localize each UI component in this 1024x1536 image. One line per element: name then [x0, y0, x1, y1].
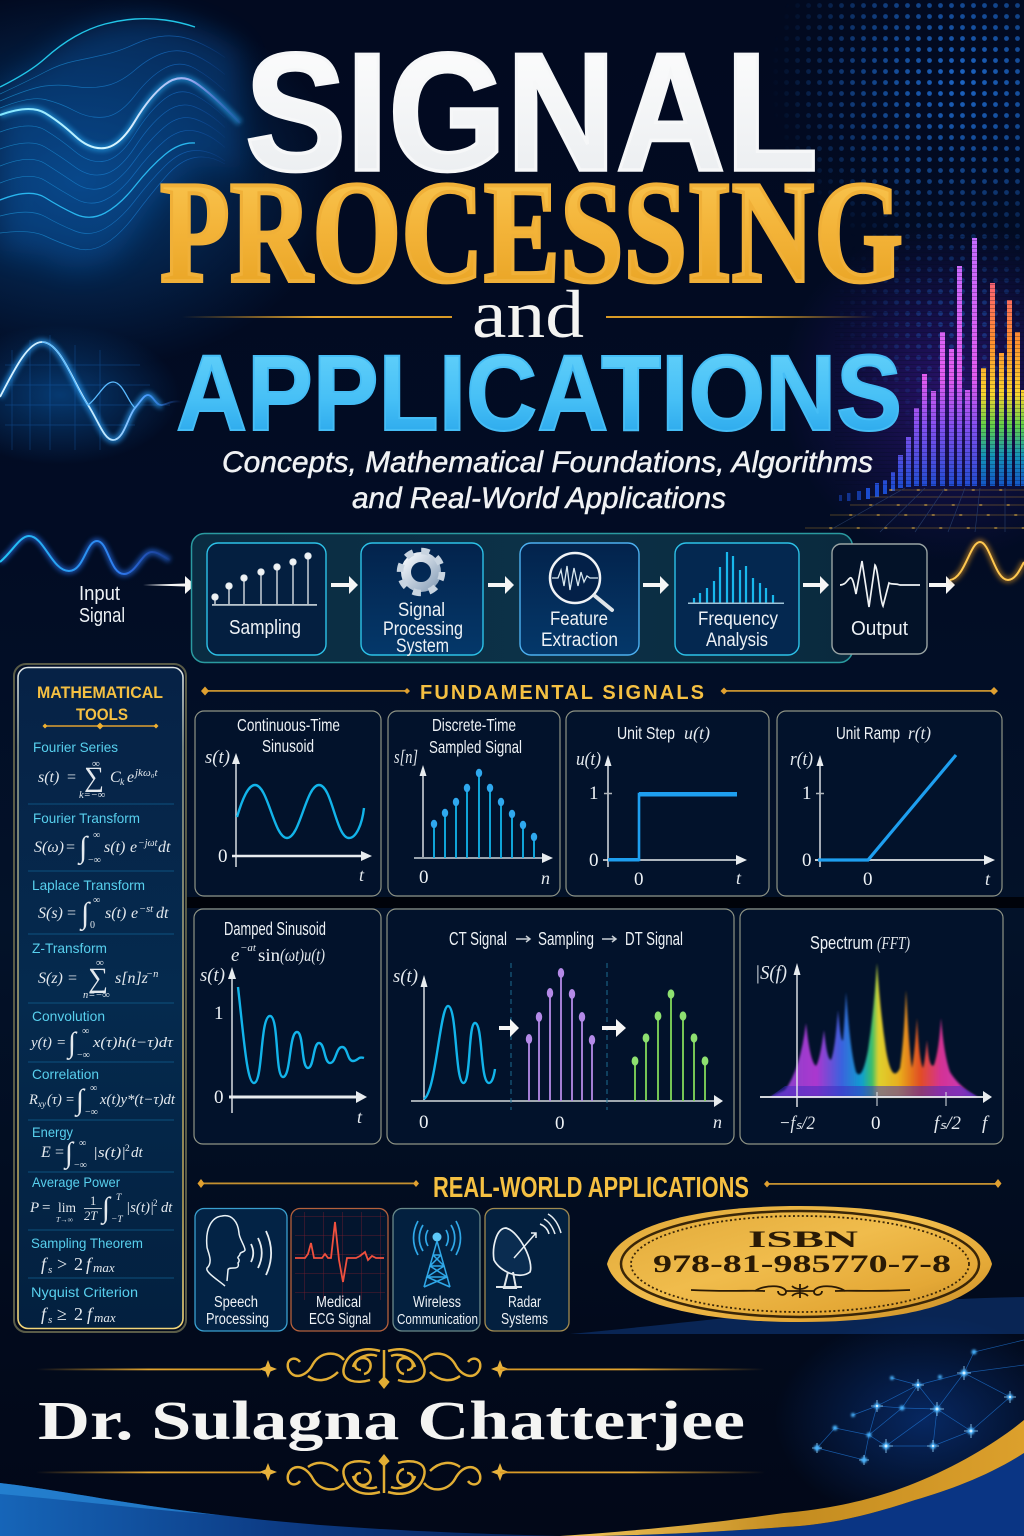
chart: damped sinusoid: Damped Sinusoid — [224, 919, 326, 939]
title: and with rules: and — [472, 276, 584, 352]
icon: output orange wave — [950, 542, 1024, 580]
chart: spectrum fft: Spectrum — [810, 933, 873, 953]
formula: average power: Average Power — [32, 1174, 120, 1190]
formula: average power: −T — [111, 1215, 123, 1225]
formula: fourier transform: Fourier Transform — [33, 810, 140, 826]
formula: sampling theorem: f — [41, 1254, 49, 1274]
card: speech processing — [195, 1208, 287, 1331]
formula: laplace transform: s(t) — [105, 905, 126, 922]
decoration: top author ornament — [36, 1349, 765, 1387]
decoration: glowing network — [775, 1315, 1024, 1525]
formula: average power: dt — [161, 1200, 173, 1216]
formula: nyquist criterion: f — [41, 1304, 49, 1324]
card: wireless communication: Wireless — [413, 1294, 461, 1311]
formula: laplace transform: ∞ — [93, 895, 100, 906]
formula: fourier series: k=−∞ — [79, 790, 105, 801]
formula: laplace transform: dt — [156, 905, 169, 922]
formula: fourier series: ∞ — [92, 758, 100, 770]
chart: unit step: t — [736, 868, 742, 888]
formula: z-transform — [32, 940, 158, 1001]
formula: z-transform: ∞ — [96, 957, 104, 969]
decoration: halftone dots top right — [784, 3, 1020, 426]
chart: discrete-time sampled signal: n — [541, 868, 550, 888]
formula: nyquist criterion: Nyquist Criterion — [31, 1284, 138, 1300]
formula: z-transform: n=−∞ — [83, 990, 110, 1001]
step: signal processing system — [361, 543, 483, 657]
subtitle: and Real-World Applications — [352, 482, 726, 515]
step: frequency analysis — [675, 543, 799, 655]
chart: spectrum fft: fₛ/2 — [934, 1113, 961, 1134]
chart: ct signal to sampling to dt signal: 0 — [419, 1112, 428, 1133]
card: speech processing: Processing — [206, 1311, 269, 1328]
formula: convolution: = — [57, 1035, 65, 1051]
formula: fourier series: s(t) — [38, 769, 59, 786]
formula: fourier transform: dt — [158, 839, 171, 856]
formula: fourier transform: s(t) — [104, 839, 125, 856]
formula: fourier transform: −jωt — [138, 838, 158, 849]
heading: real-world applications — [198, 1172, 1002, 1204]
chart: ct signal to sampling to dt signal: n — [713, 1112, 722, 1132]
chart: unit ramp: r(t) — [908, 723, 931, 744]
formula: fourier transform: −∞ — [88, 855, 101, 866]
subtitle: Concepts, Mathematical Foundations, Algorithms — [222, 446, 873, 479]
heading: mathematical tools — [37, 683, 163, 730]
chart: damped sinusoid: e — [231, 945, 239, 966]
formula: correlation: x(t)y*(t−τ)dt — [99, 1092, 176, 1108]
formula: energy: Energy — [32, 1124, 73, 1140]
chart: damped sinusoid — [194, 909, 381, 1144]
formula: nyquist criterion: s — [48, 1314, 52, 1326]
formula: fourier series: C — [110, 769, 121, 786]
chart: damped sinusoid: t — [357, 1107, 363, 1127]
formula: laplace transform: 0 — [90, 920, 95, 931]
formula: correlation: ∫ — [74, 1084, 86, 1117]
formula: sampling theorem: > — [57, 1254, 67, 1274]
decoration: bottom left blue swoosh — [0, 1483, 560, 1536]
step: frequency analysis: Frequency — [698, 609, 778, 630]
chart: unit ramp: 1 — [802, 783, 812, 804]
formula: laplace transform: S(s) — [38, 905, 63, 922]
chart: spectrum fft: 0 — [871, 1113, 880, 1134]
chart: unit ramp: t — [985, 869, 991, 889]
formula: energy: dt — [131, 1145, 144, 1161]
chart: unit ramp: Unit Ramp — [836, 723, 900, 743]
formula: average power — [29, 1174, 173, 1225]
formula: energy: ∫ — [63, 1137, 75, 1170]
formula: average power: lim — [58, 1200, 77, 1215]
formula: fourier series: ∑ — [84, 762, 104, 793]
heading: fundamental signals: FUNDAMENTAL SIGNALS — [420, 682, 704, 704]
formula: fourier series: = — [67, 769, 76, 786]
formula: convolution: ∫ — [66, 1027, 78, 1060]
card: medical ecg signal: Medical — [316, 1294, 361, 1311]
text: input signal label — [79, 583, 125, 627]
chart: spectrum fft: f — [982, 1113, 990, 1134]
formula: convolution: Convolution — [32, 1008, 105, 1024]
formula: z-transform: ∑ — [88, 963, 108, 994]
formula: laplace transform: −st — [139, 904, 154, 915]
chart: ct signal to sampling to dt signal: 0 — [555, 1113, 564, 1134]
heading: real-world applications: REAL-WORLD APPLICATIONS — [433, 1172, 749, 1204]
chart: spectrum fft: |S(f) — [755, 962, 787, 984]
chart: continuous-time sinusoid: Continuous-Time — [237, 715, 340, 735]
card: radar systems — [485, 1208, 569, 1331]
chart: discrete-time sampled signal — [388, 711, 560, 896]
formula: correlation: = — [66, 1092, 74, 1108]
chart: unit ramp: r(t) — [790, 749, 813, 770]
formula: nyquist criterion — [31, 1284, 138, 1326]
formula: correlation: ∞ — [90, 1083, 97, 1094]
formula: laplace transform: Laplace Transform — [32, 877, 145, 893]
chart: continuous-time sinusoid — [195, 711, 381, 896]
formula: energy: E — [40, 1144, 51, 1161]
decoration: medallion flourish — [691, 1284, 910, 1298]
step: feature extraction — [520, 543, 639, 655]
step: feature extraction: Extraction — [541, 630, 618, 651]
arrow — [331, 576, 358, 594]
card: radar systems: Systems — [501, 1311, 548, 1328]
formula: nyquist criterion: ≥ — [57, 1304, 67, 1324]
chart: ct signal to sampling to dt signal — [387, 909, 734, 1144]
formula: z-transform: S(z) — [38, 970, 63, 987]
formula: laplace transform: e — [131, 905, 138, 922]
formula: laplace transform: = — [67, 905, 76, 922]
formula: convolution: ∞ — [82, 1026, 89, 1037]
step: sampling: Sampling — [229, 617, 301, 639]
formula: correlation: xy — [37, 1099, 46, 1109]
step: output: Output — [851, 618, 908, 640]
step: signal processing system: Processing — [383, 619, 463, 640]
formula: sampling theorem: f — [86, 1254, 94, 1274]
formula: fourier series: Fourier Series — [33, 739, 118, 755]
formula: average power: |s(t)| — [126, 1200, 154, 1216]
decoration: bottom right gold swoosh — [560, 1420, 1024, 1536]
chart: continuous-time sinusoid: s(t) — [205, 747, 230, 768]
card: wireless communication: Communication — [397, 1311, 478, 1328]
chart: damped sinusoid: sin — [258, 945, 280, 965]
formula: nyquist criterion: max — [94, 1310, 116, 1325]
chart: continuous-time sinusoid: t — [359, 865, 365, 885]
chart: ct signal to sampling to dt signal: DT Signal — [625, 929, 683, 949]
formula: laplace transform — [32, 877, 169, 932]
formula: average power: 1 — [90, 1194, 96, 1208]
formula: fourier series: e — [127, 769, 134, 786]
formula: laplace transform: ∫ — [79, 897, 91, 932]
arrow — [643, 576, 669, 594]
formula: sampling theorem: max — [93, 1260, 115, 1275]
chart: damped sinusoid: 0 — [214, 1087, 224, 1108]
formula: sampling theorem — [31, 1235, 143, 1276]
chart: unit step: u(t) — [684, 723, 710, 744]
formula: energy — [32, 1124, 144, 1171]
card: radar systems: Radar — [508, 1294, 541, 1311]
step: output — [832, 544, 927, 654]
badge: isbn medallion: 978-81-985770-7-8 — [653, 1251, 951, 1278]
formula: convolution: −∞ — [77, 1050, 90, 1061]
formula: correlation: (τ) — [47, 1092, 62, 1108]
chart: unit ramp: 0 — [863, 869, 872, 890]
step: frequency analysis: Analysis — [706, 630, 768, 651]
chart: damped sinusoid: 1 — [214, 1003, 224, 1024]
formula: convolution: y(t) — [29, 1035, 52, 1051]
card: medical ecg signal — [291, 1208, 388, 1331]
decoration: perspective floor grid — [805, 488, 1024, 532]
formula: nyquist criterion: 2 — [74, 1304, 83, 1324]
formula: average power: T — [116, 1193, 122, 1203]
chart: discrete-time sampled signal: Discrete-Time — [432, 715, 516, 735]
author name: Dr. Sulagna Chatterjee — [38, 1390, 745, 1451]
chart: damped sinusoid: s(t) — [200, 965, 225, 986]
formula: nyquist criterion: f — [87, 1304, 95, 1324]
chart: unit step: 1 — [589, 783, 598, 804]
chart: damped sinusoid: −at — [240, 942, 257, 954]
arrow — [803, 576, 829, 594]
formula: average power: T→∞ — [56, 1215, 74, 1224]
chart: ct signal to sampling to dt signal: CT Signal — [449, 929, 507, 949]
chart: unit ramp: 0 — [802, 850, 812, 871]
arrow — [488, 576, 514, 594]
formula: fourier series: k — [120, 778, 125, 788]
step: sampling — [207, 543, 326, 655]
panel: processing pipeline — [192, 534, 927, 662]
chart: unit step: Unit Step — [617, 723, 675, 743]
formula: energy: 2 — [125, 1144, 130, 1154]
formula: z-transform: s[n]z — [115, 970, 149, 987]
step: signal processing system: Signal — [398, 600, 445, 621]
formula: z-transform: Z-Transform — [32, 940, 107, 956]
formula: energy: |s(t)| — [93, 1145, 126, 1161]
formula: correlation: R — [28, 1092, 38, 1108]
formula: energy: = — [55, 1144, 64, 1161]
formula: average power: 2T — [84, 1209, 98, 1223]
badge: isbn medallion — [607, 1206, 992, 1322]
chart: ct signal to sampling to dt signal: Sampling — [538, 929, 594, 949]
formula: sampling theorem: 2 — [74, 1254, 83, 1274]
badge: isbn medallion: ISBN — [748, 1227, 859, 1252]
formula: energy: ∞ — [79, 1138, 86, 1149]
chart: unit step — [566, 711, 769, 896]
decoration: left pulse wave — [0, 325, 182, 465]
chart: ct signal to sampling to dt signal: s(t) — [393, 966, 418, 987]
formula: fourier transform: S(ω) — [34, 839, 64, 856]
formula: fourier series: jkω₀t — [133, 767, 159, 779]
formula: fourier transform: ∫ — [77, 831, 89, 866]
card: wireless communication — [393, 1208, 480, 1331]
chart: continuous-time sinusoid: Sinusoid — [262, 736, 314, 756]
formula: correlation — [28, 1066, 176, 1118]
heading: fundamental signals — [201, 682, 998, 704]
decoration: bottom author ornament — [36, 1456, 765, 1494]
icon: input signal wave — [0, 536, 170, 574]
heading: mathematical tools: TOOLS — [76, 705, 128, 724]
chart: spectrum fft — [740, 909, 1003, 1144]
chart: continuous-time sinusoid: 0 — [218, 846, 228, 867]
chart: rainbow equalizer bars — [835, 236, 1024, 501]
formula: average power: ∫ — [100, 1192, 112, 1225]
formula: average power: P — [29, 1200, 39, 1216]
formula: correlation: −∞ — [85, 1107, 98, 1118]
text: input signal label: Input — [79, 583, 120, 605]
formula: z-transform: −n — [146, 969, 158, 980]
formula: fourier series — [33, 739, 159, 801]
card: medical ecg signal: ECG Signal — [309, 1311, 371, 1328]
chart: spectrum fft: −fₛ/2 — [779, 1113, 815, 1134]
formula: energy: −∞ — [74, 1160, 87, 1171]
heading: mathematical tools: MATHEMATICAL — [37, 683, 163, 702]
chart: discrete-time sampled signal: 0 — [419, 867, 428, 888]
chart: spectrum fft: (FFT) — [877, 933, 910, 954]
formula: average power: = — [42, 1200, 50, 1216]
step: signal processing system: System — [396, 636, 449, 657]
formula: fourier transform: ∞ — [93, 830, 100, 841]
chart: unit step: 0 — [634, 869, 644, 890]
decoration: top-left flowing signal waves — [0, 19, 240, 268]
formula: average power: 2 — [153, 1198, 158, 1208]
chart: discrete-time sampled signal: Sampled Signal — [429, 737, 522, 757]
subtitle — [222, 446, 873, 515]
card: speech processing: Speech — [214, 1294, 258, 1311]
arrow: input to pipeline — [143, 576, 195, 594]
chart: damped sinusoid: (ωt)u(t) — [280, 945, 325, 966]
panel: mathematical tools — [14, 664, 186, 1332]
formula: correlation: Correlation — [32, 1066, 99, 1082]
formula: sampling theorem: s — [48, 1264, 52, 1276]
formula: convolution: x(τ)h(t−τ)dτ — [92, 1035, 174, 1051]
formula: convolution — [29, 1008, 174, 1061]
formula: z-transform: = — [68, 970, 77, 987]
step: feature extraction: Feature — [550, 609, 608, 630]
text: input signal label: Signal — [79, 605, 125, 627]
chart: unit ramp — [777, 711, 1002, 896]
chart: unit step: u(t) — [576, 749, 601, 770]
arrow: to output wave — [929, 576, 955, 594]
title: SIGNAL: SIGNAL — [245, 18, 818, 206]
chart: discrete-time sampled signal: s[n] — [394, 747, 418, 768]
formula: sampling theorem: Sampling Theorem — [31, 1235, 143, 1251]
chart: unit step: 0 — [589, 850, 598, 871]
formula: fourier transform: = — [66, 839, 75, 856]
formula: fourier transform — [33, 810, 171, 866]
formula: fourier transform: e — [130, 839, 137, 856]
title: APPLICATIONS: APPLICATIONS — [176, 332, 902, 453]
